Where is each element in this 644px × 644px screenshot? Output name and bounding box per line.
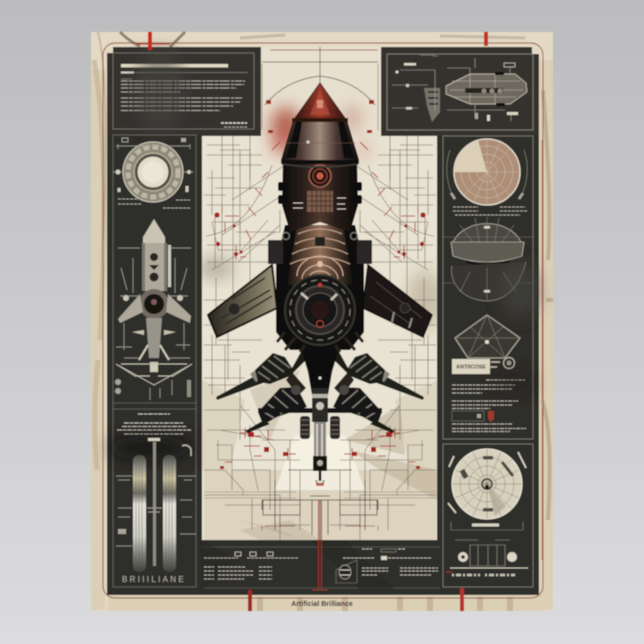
icon: top ring diagram: [113, 138, 193, 208]
panel: left column: [107, 135, 202, 595]
engine ring: [277, 275, 363, 352]
panel: bottom band: [200, 540, 440, 595]
smudges over panels: [135, 48, 540, 390]
panel: top-right schematic: [381, 47, 539, 136]
chart: gauge strip: [446, 540, 528, 575]
text block: mid column note: [117, 414, 191, 434]
red axis line: [312, 483, 328, 590]
lower centre schematic: [262, 470, 378, 535]
blueprint schematic lines: [204, 47, 436, 540]
red registration marks: [136, 32, 488, 611]
red ink wash around nose: [271, 105, 370, 159]
footer title: Artificial Brilliance: [291, 601, 353, 608]
chart: tan radial disc: [447, 139, 527, 215]
mid hull: [278, 160, 362, 232]
label: model plate: ANTIICOSE: [456, 364, 486, 370]
panel: top-left text block: [107, 47, 261, 136]
nose tip: [292, 83, 348, 122]
dark side frames: [107, 47, 539, 595]
central blueprint area: [198, 47, 443, 540]
dark smudge above tanks: [108, 436, 192, 460]
upper cone: [281, 120, 359, 167]
label: model plate: [452, 358, 514, 374]
text block: model notes: [452, 380, 526, 432]
registration outline: [103, 43, 543, 598]
engine cluster: [216, 338, 424, 484]
poster paper: [91, 32, 553, 611]
icon: shuttle diagram: [115, 219, 192, 400]
icon: sensor dome: [336, 560, 357, 583]
brand wordmark: BRIIILIANE: [122, 575, 186, 584]
top arc construction: [262, 47, 378, 136]
wings: [208, 265, 432, 337]
lower hull: [268, 225, 372, 350]
chart: diamond grid: [455, 315, 520, 358]
icon: warning tag: [452, 411, 494, 422]
chart: dome section: [443, 217, 533, 301]
chart: twin fuel tanks: [116, 438, 196, 572]
rocket: [208, 83, 432, 484]
softened artwork: [91, 32, 553, 611]
panel: right column: [437, 136, 539, 595]
chart: compass dial: [448, 449, 526, 530]
